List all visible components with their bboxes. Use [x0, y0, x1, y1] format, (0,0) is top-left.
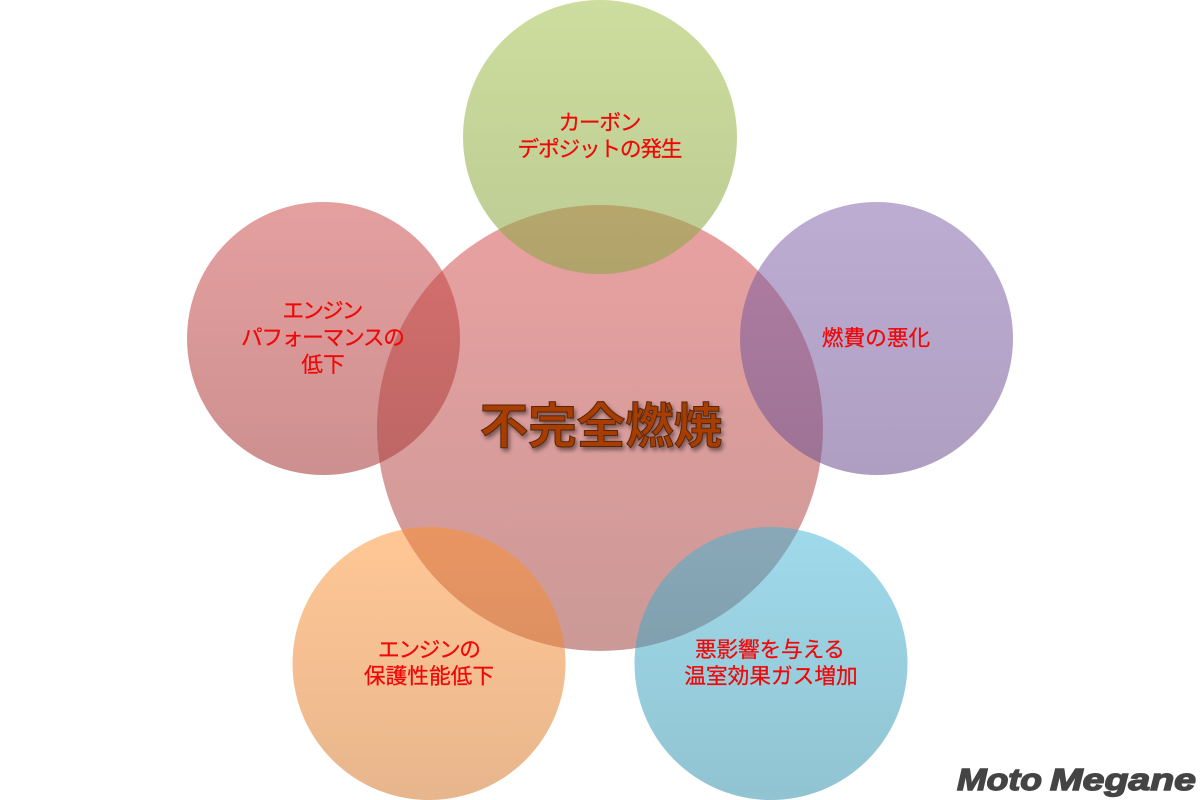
label: engine protection: エンジンの [378, 637, 481, 662]
label: engine performance: エンジン [282, 298, 364, 323]
label: carbon deposit: カーボン [558, 110, 642, 135]
label: engine performance: 低下 [301, 352, 345, 377]
central title: 不完全燃焼 [480, 400, 722, 454]
label: engine performance: パフォーマンスの [241, 325, 405, 350]
circle: bottom-right blue [634, 527, 908, 800]
circle: bottom-left orange [292, 527, 566, 800]
label: carbon deposit: デポジットの発生 [518, 136, 682, 162]
logo: Moto Megane [957, 762, 1196, 797]
circle: central 不完全燃焼 [377, 205, 823, 651]
logo: Moto Megane: Megane [1050, 762, 1196, 797]
logo: Moto Megane: Moto [957, 762, 1042, 797]
circle: right purple [740, 202, 1013, 475]
circle: top green [463, 0, 737, 274]
label: greenhouse gas: 温室効果ガス増加 [684, 664, 858, 688]
label: greenhouse gas: 悪影響を与える [695, 637, 845, 662]
circle: left red [187, 202, 460, 475]
label: engine protection: 保護性能低下 [364, 664, 494, 688]
label: fuel economy: 燃費の悪化 [822, 326, 930, 350]
